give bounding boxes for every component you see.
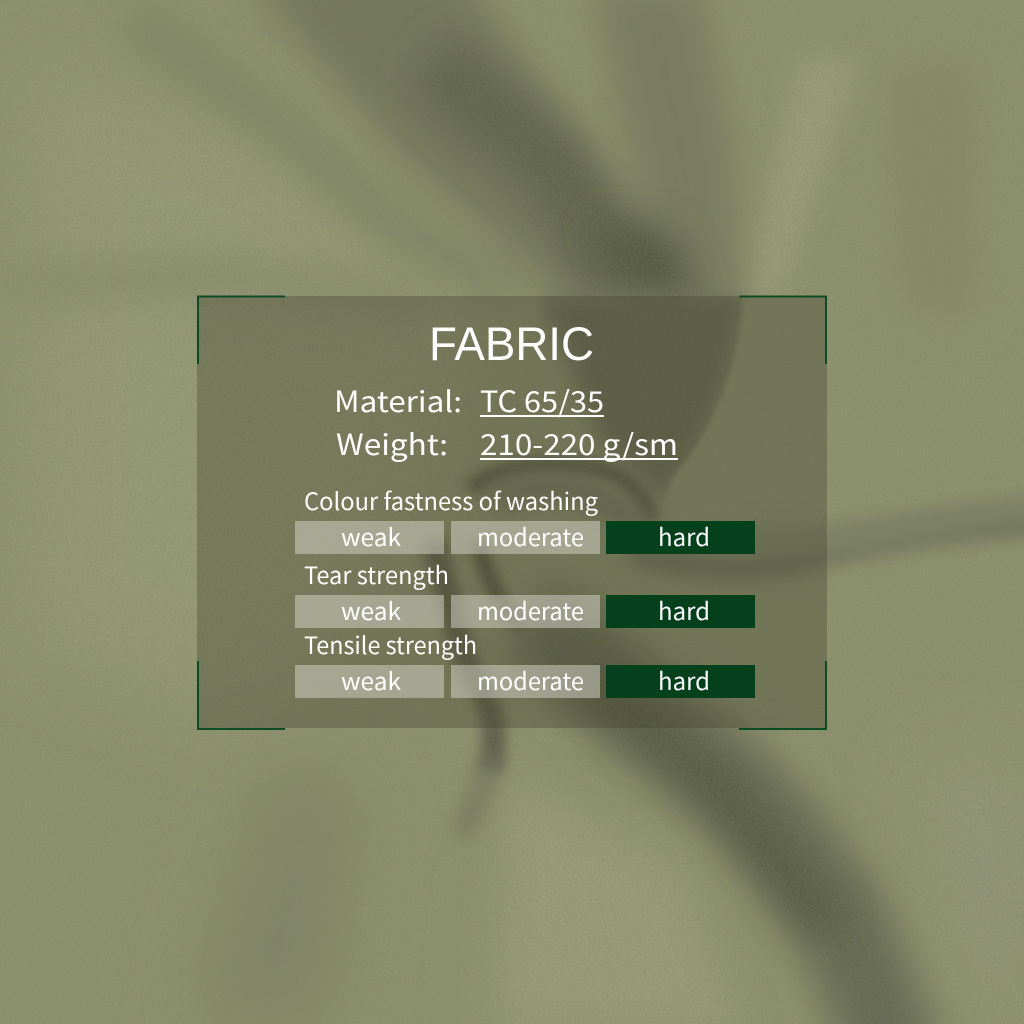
corner bracket: bottom right [739,661,826,729]
rating: tear strength: moderate [477,592,584,627]
rating: colour fastness of washing: hard [658,518,710,553]
corner bracket: top right [739,296,826,364]
rating: tear strength [295,556,755,628]
material row: TC 65/35 [480,379,604,421]
weight row: Weight: [336,422,448,464]
weight row [336,422,678,464]
rating: tear strength: weak [341,592,401,627]
corner bracket: bottom left [198,661,285,729]
rating: tear strength: Tear strength [304,556,449,591]
rating: tensile strength: Tensile strength [304,626,477,661]
rating: colour fastness of washing: moderate [477,518,584,553]
panel: translucent overlay [197,296,827,728]
material row [334,379,604,421]
corner bracket: top left [198,296,285,364]
weight row: 210-220 g/sm [480,422,678,464]
rating: tear strength: hard [658,592,710,627]
title: FABRIC [429,317,594,370]
rating: tensile strength: hard [658,662,710,697]
rating: tensile strength [295,626,755,698]
rating: colour fastness of washing: Colour fastness of washing [304,482,598,517]
rating: colour fastness of washing [295,482,755,554]
rating: tensile strength: weak [341,662,401,697]
rating: tensile strength: moderate [477,662,584,697]
rating: colour fastness of washing: weak [341,518,401,553]
material row: Material: [334,379,462,421]
